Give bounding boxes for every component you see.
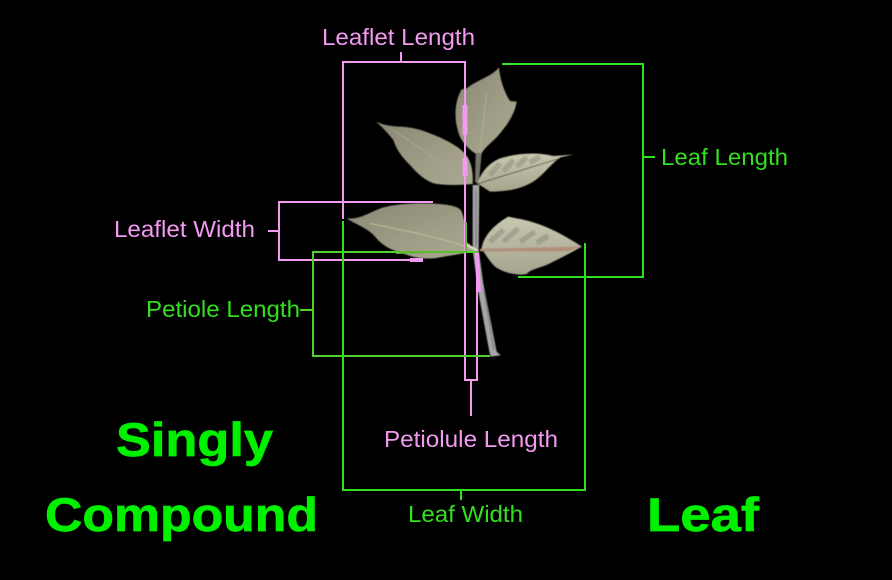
- diagram: petiole length bracket: [300, 252, 490, 356]
- lower right leaflet: [482, 217, 582, 275]
- rachis and stalk: [473, 185, 501, 357]
- label: leaflet width: Leaflet Width: [114, 216, 255, 242]
- upper right leaflet: [477, 154, 573, 192]
- leaf photograph: [347, 67, 582, 357]
- terminal leaflet: [455, 67, 517, 153]
- diagram: leaflet width bracket: [268, 202, 433, 260]
- label: leaflet length: Leaflet Length: [322, 24, 475, 50]
- diagram: leaf width bracket: [343, 221, 585, 500]
- label: leaf width: Leaf Width: [408, 501, 523, 527]
- label: leaf length: Leaf Length: [661, 144, 788, 170]
- upper left leaflet: [376, 122, 473, 185]
- label: petiolule length: Petiolule Length: [384, 426, 558, 452]
- diagram: petiole overlap on leaf: [395, 222, 467, 254]
- diagram: leaflet length bracket: [343, 52, 479, 416]
- title word: Singly: Singly: [116, 413, 273, 466]
- title word: Compound: Compound: [45, 488, 318, 541]
- lower left leaflet: [347, 203, 477, 259]
- diagram: leaf length bracket: [502, 64, 655, 277]
- title word: Leaf: Leaf: [647, 488, 759, 541]
- label: petiole length: Petiole Length: [146, 296, 300, 322]
